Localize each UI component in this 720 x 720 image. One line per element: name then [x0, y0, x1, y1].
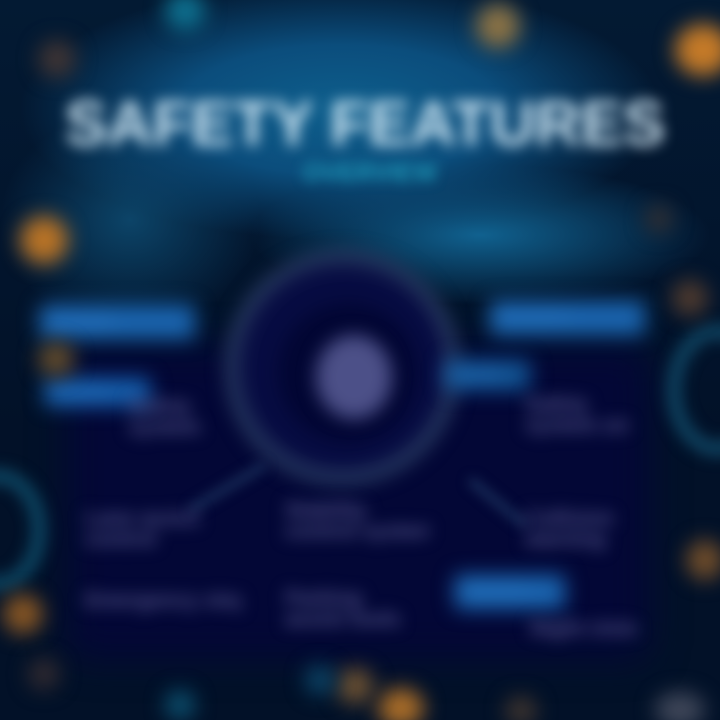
- heading: right second: [445, 360, 530, 390]
- heading: top left: [40, 305, 195, 339]
- heading: left second: [45, 378, 150, 406]
- panel: dark content area: [66, 345, 651, 660]
- text block: lower left: [82, 506, 202, 552]
- heading: left second: Brakes: [45, 382, 112, 404]
- outer ring: [225, 250, 460, 485]
- central diagram: [218, 245, 466, 492]
- icon: ring left: [0, 470, 45, 590]
- heading: top right: [490, 301, 645, 335]
- text block: lower right: [522, 504, 616, 554]
- text block: bottom center: [281, 585, 402, 632]
- text block: lower center: [282, 496, 432, 546]
- heading: bottom right: Camera: [455, 579, 528, 601]
- heading: right second: Alerts: [445, 364, 502, 386]
- heading: bottom right: [455, 575, 565, 609]
- subtitle: OVERVIEW: [303, 159, 437, 187]
- center icon: [316, 335, 392, 419]
- heading: top right: Sensors: [490, 305, 569, 327]
- icon: ring right: [668, 325, 720, 455]
- inner dark ring: [278, 303, 418, 443]
- text block: right: [522, 391, 631, 440]
- text block: left: [126, 393, 203, 442]
- heading: top left: Airbags: [40, 309, 114, 331]
- title: SAFETY FEATURES: [65, 89, 665, 159]
